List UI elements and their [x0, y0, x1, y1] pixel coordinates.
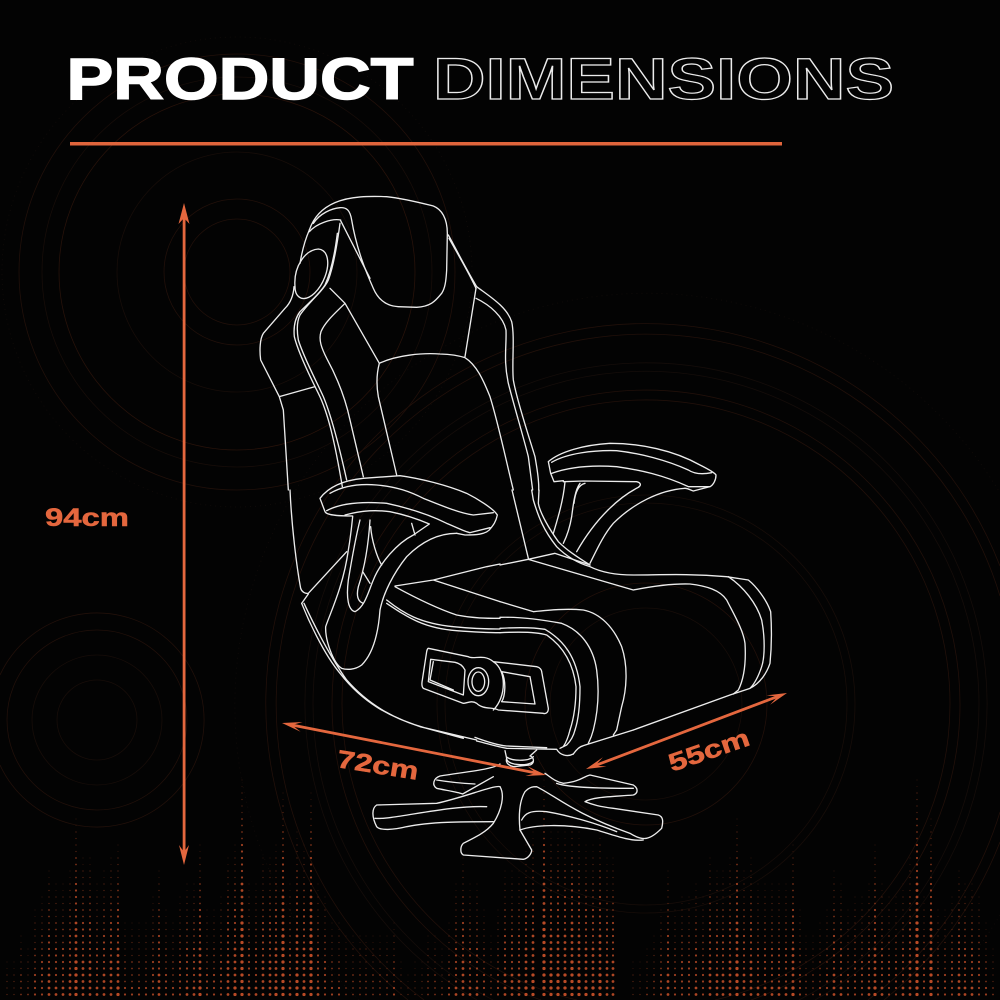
- depth arrow: [586, 693, 787, 769]
- height arrow: [178, 203, 190, 865]
- chair: speaker panel: [422, 648, 548, 714]
- chair: headrest and upper backrest: [260, 196, 539, 490]
- title: [66, 47, 894, 112]
- title word: PRODUCT: PRODUCT: [66, 47, 414, 112]
- depth label: 55cm: [665, 724, 753, 778]
- equalizer dot field: [7, 780, 993, 998]
- title word: DIMENSIONS (outlined): DIMENSIONS: [433, 47, 894, 112]
- chair: column and star base: [373, 730, 663, 859]
- chair: right armrest and seat cushion: [500, 443, 771, 730]
- chair: left armrest, lower shell and speaker panel: [290, 476, 548, 740]
- width arrow: [282, 722, 546, 776]
- width label: 72cm: [335, 745, 420, 786]
- chair line drawing: [260, 196, 771, 859]
- height label: 94cm: [45, 504, 129, 532]
- title underline: [70, 142, 782, 146]
